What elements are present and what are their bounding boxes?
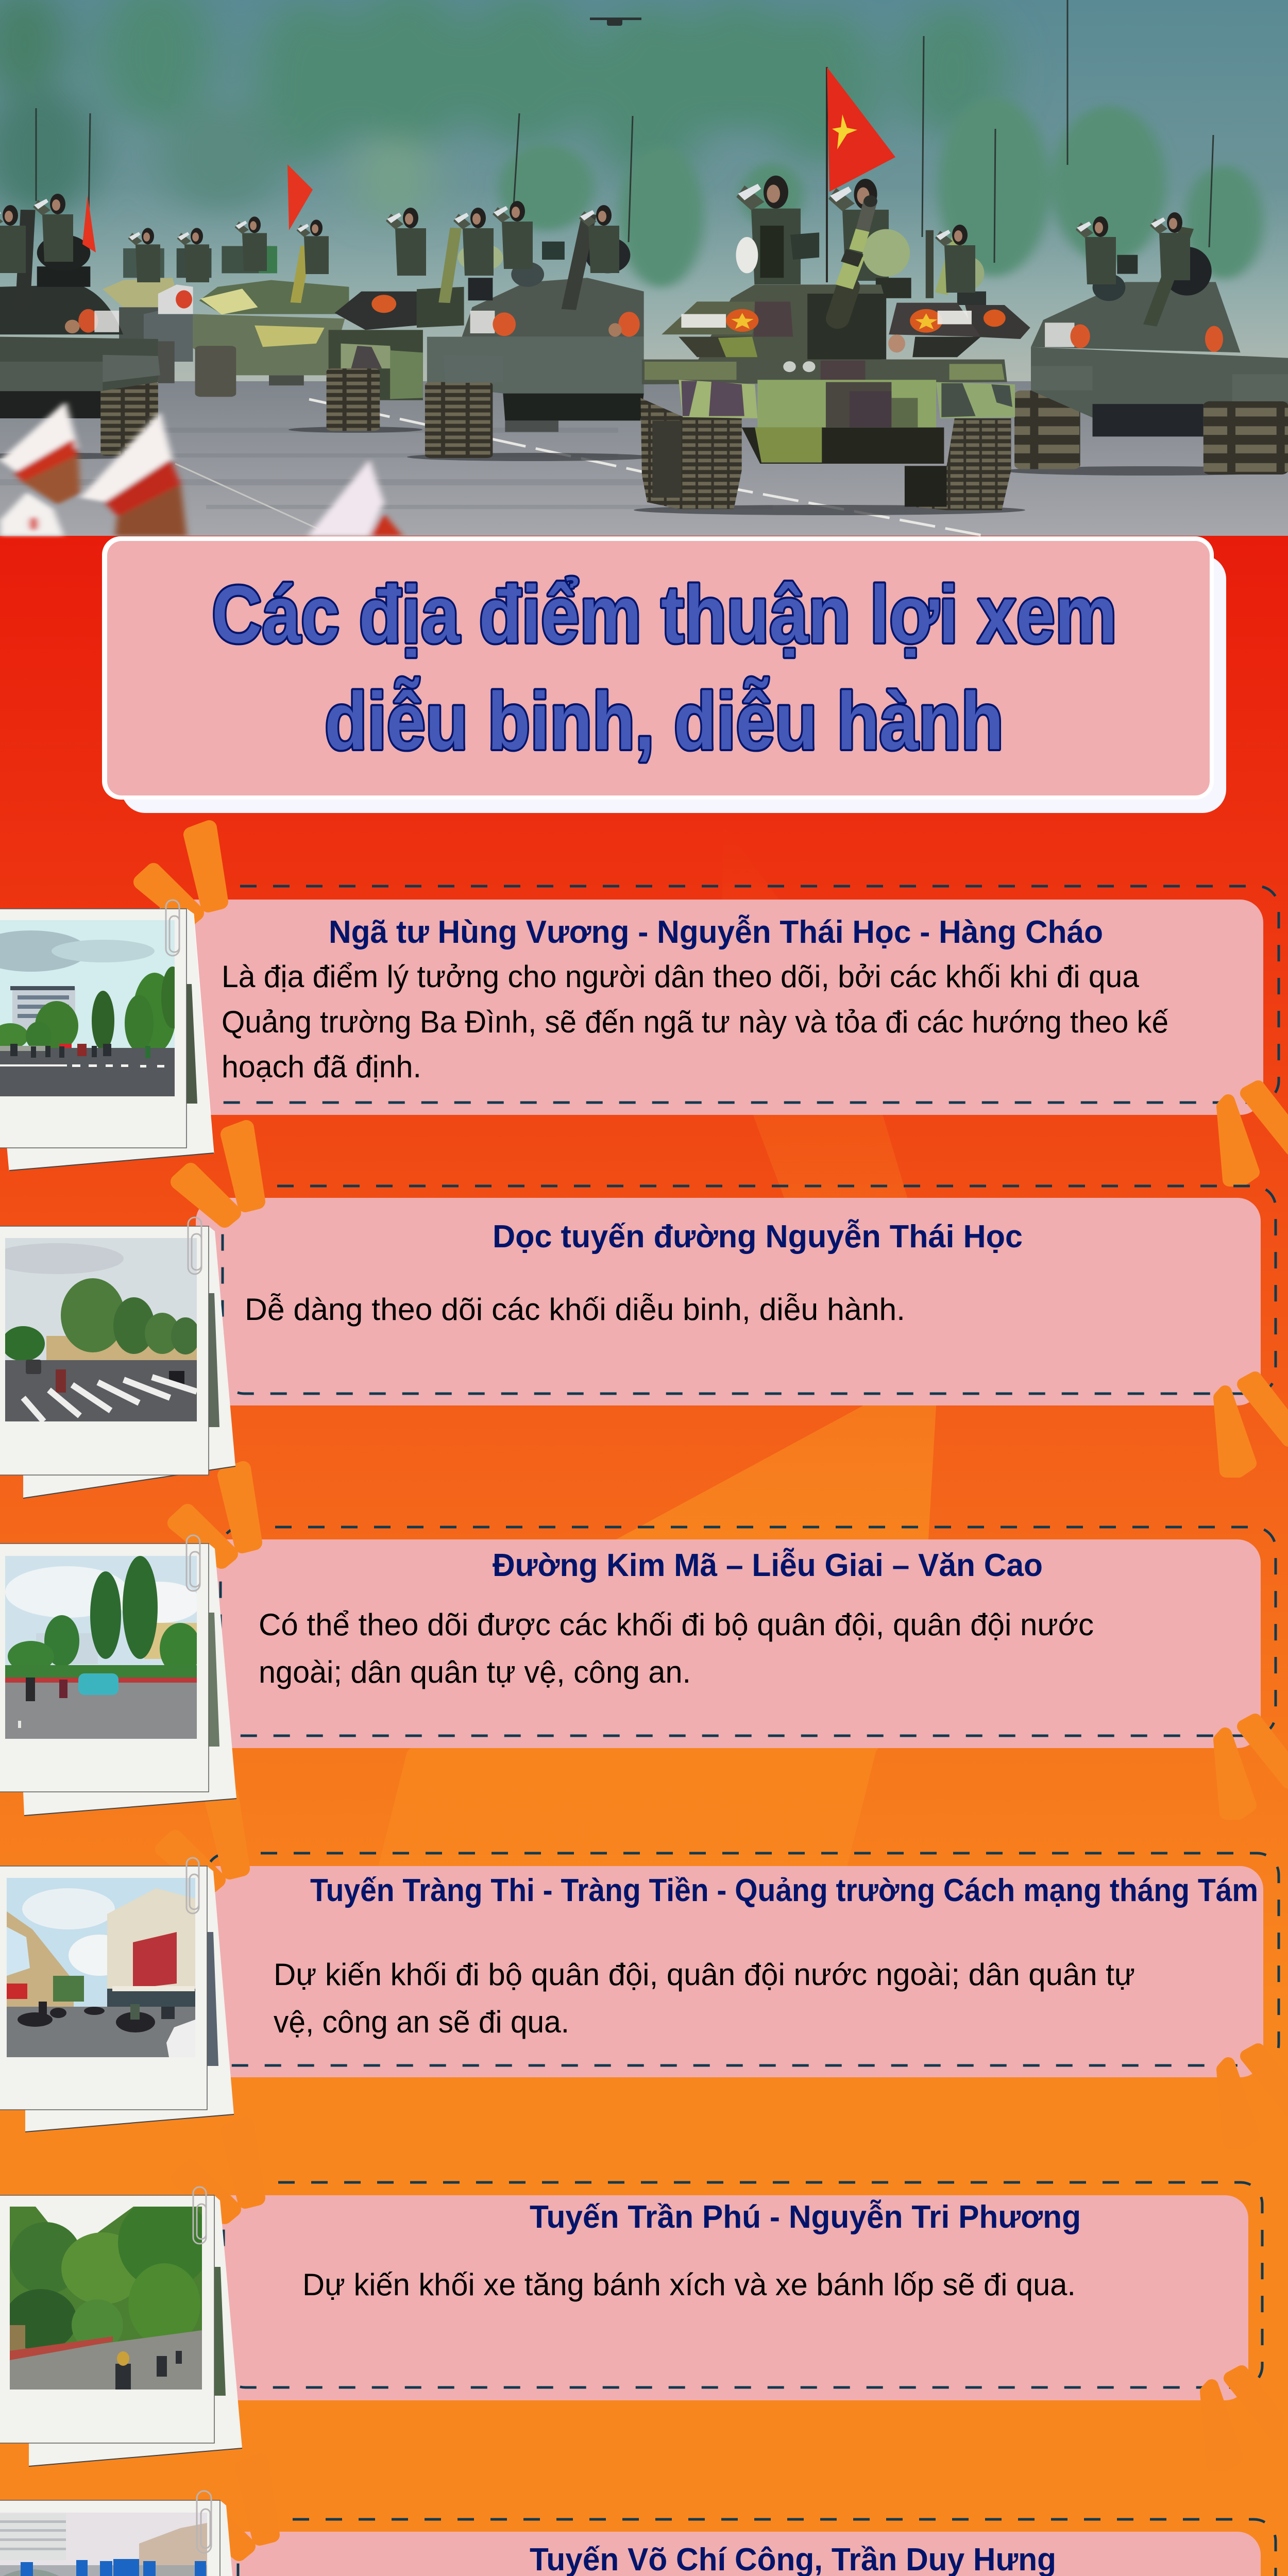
drone <box>590 18 641 26</box>
paperclip <box>188 1217 201 1274</box>
panel: Tuyến Trần Phú <box>178 2124 1278 2465</box>
left and back tanks <box>0 210 644 458</box>
body text: Có thể theo dõi được các khối đi bộ quân đội, quân đội nước <box>259 1607 1094 1642</box>
antennas <box>36 0 1213 263</box>
flags <box>82 67 895 282</box>
soldiers <box>1076 216 1116 284</box>
gun <box>838 201 871 318</box>
road <box>0 381 1288 536</box>
tracks <box>640 398 742 509</box>
body text: Là địa điểm lý tưởng cho người dân theo dõi, bởi các khối khi đi qua <box>222 959 1140 994</box>
panel: Dọc tuyến đường Nguyễn Thái Học <box>178 1128 1288 1471</box>
title text <box>212 569 1117 767</box>
body text: Dự kiến khối xe tăng bánh xích và xe bánh lốp sẽ đi qua. <box>302 2267 1076 2302</box>
panel: Tuyến Tràng Thi <box>163 1795 1288 2143</box>
photo card 1 <box>0 900 214 1171</box>
photo card 3 <box>0 1535 236 1816</box>
olive tank <box>193 314 345 375</box>
paperclip <box>187 1858 199 1913</box>
body text: Quảng trường Ba Đình, sẽ đến ngã tư này và tỏa đi các hướng theo kế <box>222 1005 1168 1039</box>
far tank <box>103 278 181 307</box>
heading: Ngã tư Hùng Vương - Nguyễn Thái Học - Hàng Cháo <box>329 914 1103 950</box>
tank 134 <box>505 420 558 432</box>
body text: Dễ dàng theo dõi các khối diễu binh, diễu hành. <box>245 1292 905 1327</box>
heading: Tuyến Trần Phú - Nguyễn Tri Phương <box>530 2199 1081 2235</box>
heading: Dọc tuyến đường Nguyễn Thái Học <box>493 1219 1023 1255</box>
heading: Đường Kim Mã – Liễu Giai – Văn Cao <box>493 1548 1043 1583</box>
body text <box>222 959 1168 1084</box>
right tank <box>1014 228 1288 474</box>
panel: Đường Kim Mã <box>175 1469 1288 1813</box>
second camo tank behind main <box>941 237 1030 339</box>
paperclip <box>166 900 179 956</box>
body text <box>259 1607 1094 1689</box>
paperclip <box>187 1535 200 1591</box>
body text: hoạch đã định. <box>222 1049 421 1084</box>
body text: Dự kiến khối đi bộ quân đội, quân đội nước ngoài; dân quân tự <box>274 1957 1135 1992</box>
body text <box>274 1957 1135 2039</box>
title text: diễu binh, diễu hành <box>325 676 1004 767</box>
main tank <box>640 195 1015 510</box>
paperclip <box>197 2491 211 2553</box>
panel: Tuyến Võ Chí Công <box>193 2461 1288 2576</box>
photo card 2 <box>0 1217 235 1498</box>
paperclip <box>193 2187 206 2244</box>
hull <box>742 428 944 464</box>
body text: ngoài; dân quân tự vệ, công an. <box>259 1655 691 1689</box>
tank 564 <box>329 330 423 400</box>
photo card 4 <box>0 1858 234 2132</box>
photo card 6 <box>0 2491 250 2576</box>
title panel <box>102 536 1226 813</box>
fenders <box>679 380 757 418</box>
shadows <box>0 427 1288 515</box>
title text: Các địa điểm thuận lợi xem <box>212 569 1117 660</box>
tank 133 <box>100 381 158 456</box>
photo card 5 <box>0 2187 242 2466</box>
foreground honor guard caps <box>0 401 402 536</box>
body text: vệ, công an sẽ đi qua. <box>274 2005 569 2039</box>
forest backdrop <box>0 0 1263 287</box>
panel: Ngã tư Hùng Vương <box>141 828 1288 1180</box>
hero photo: tank parade <box>0 0 1288 536</box>
